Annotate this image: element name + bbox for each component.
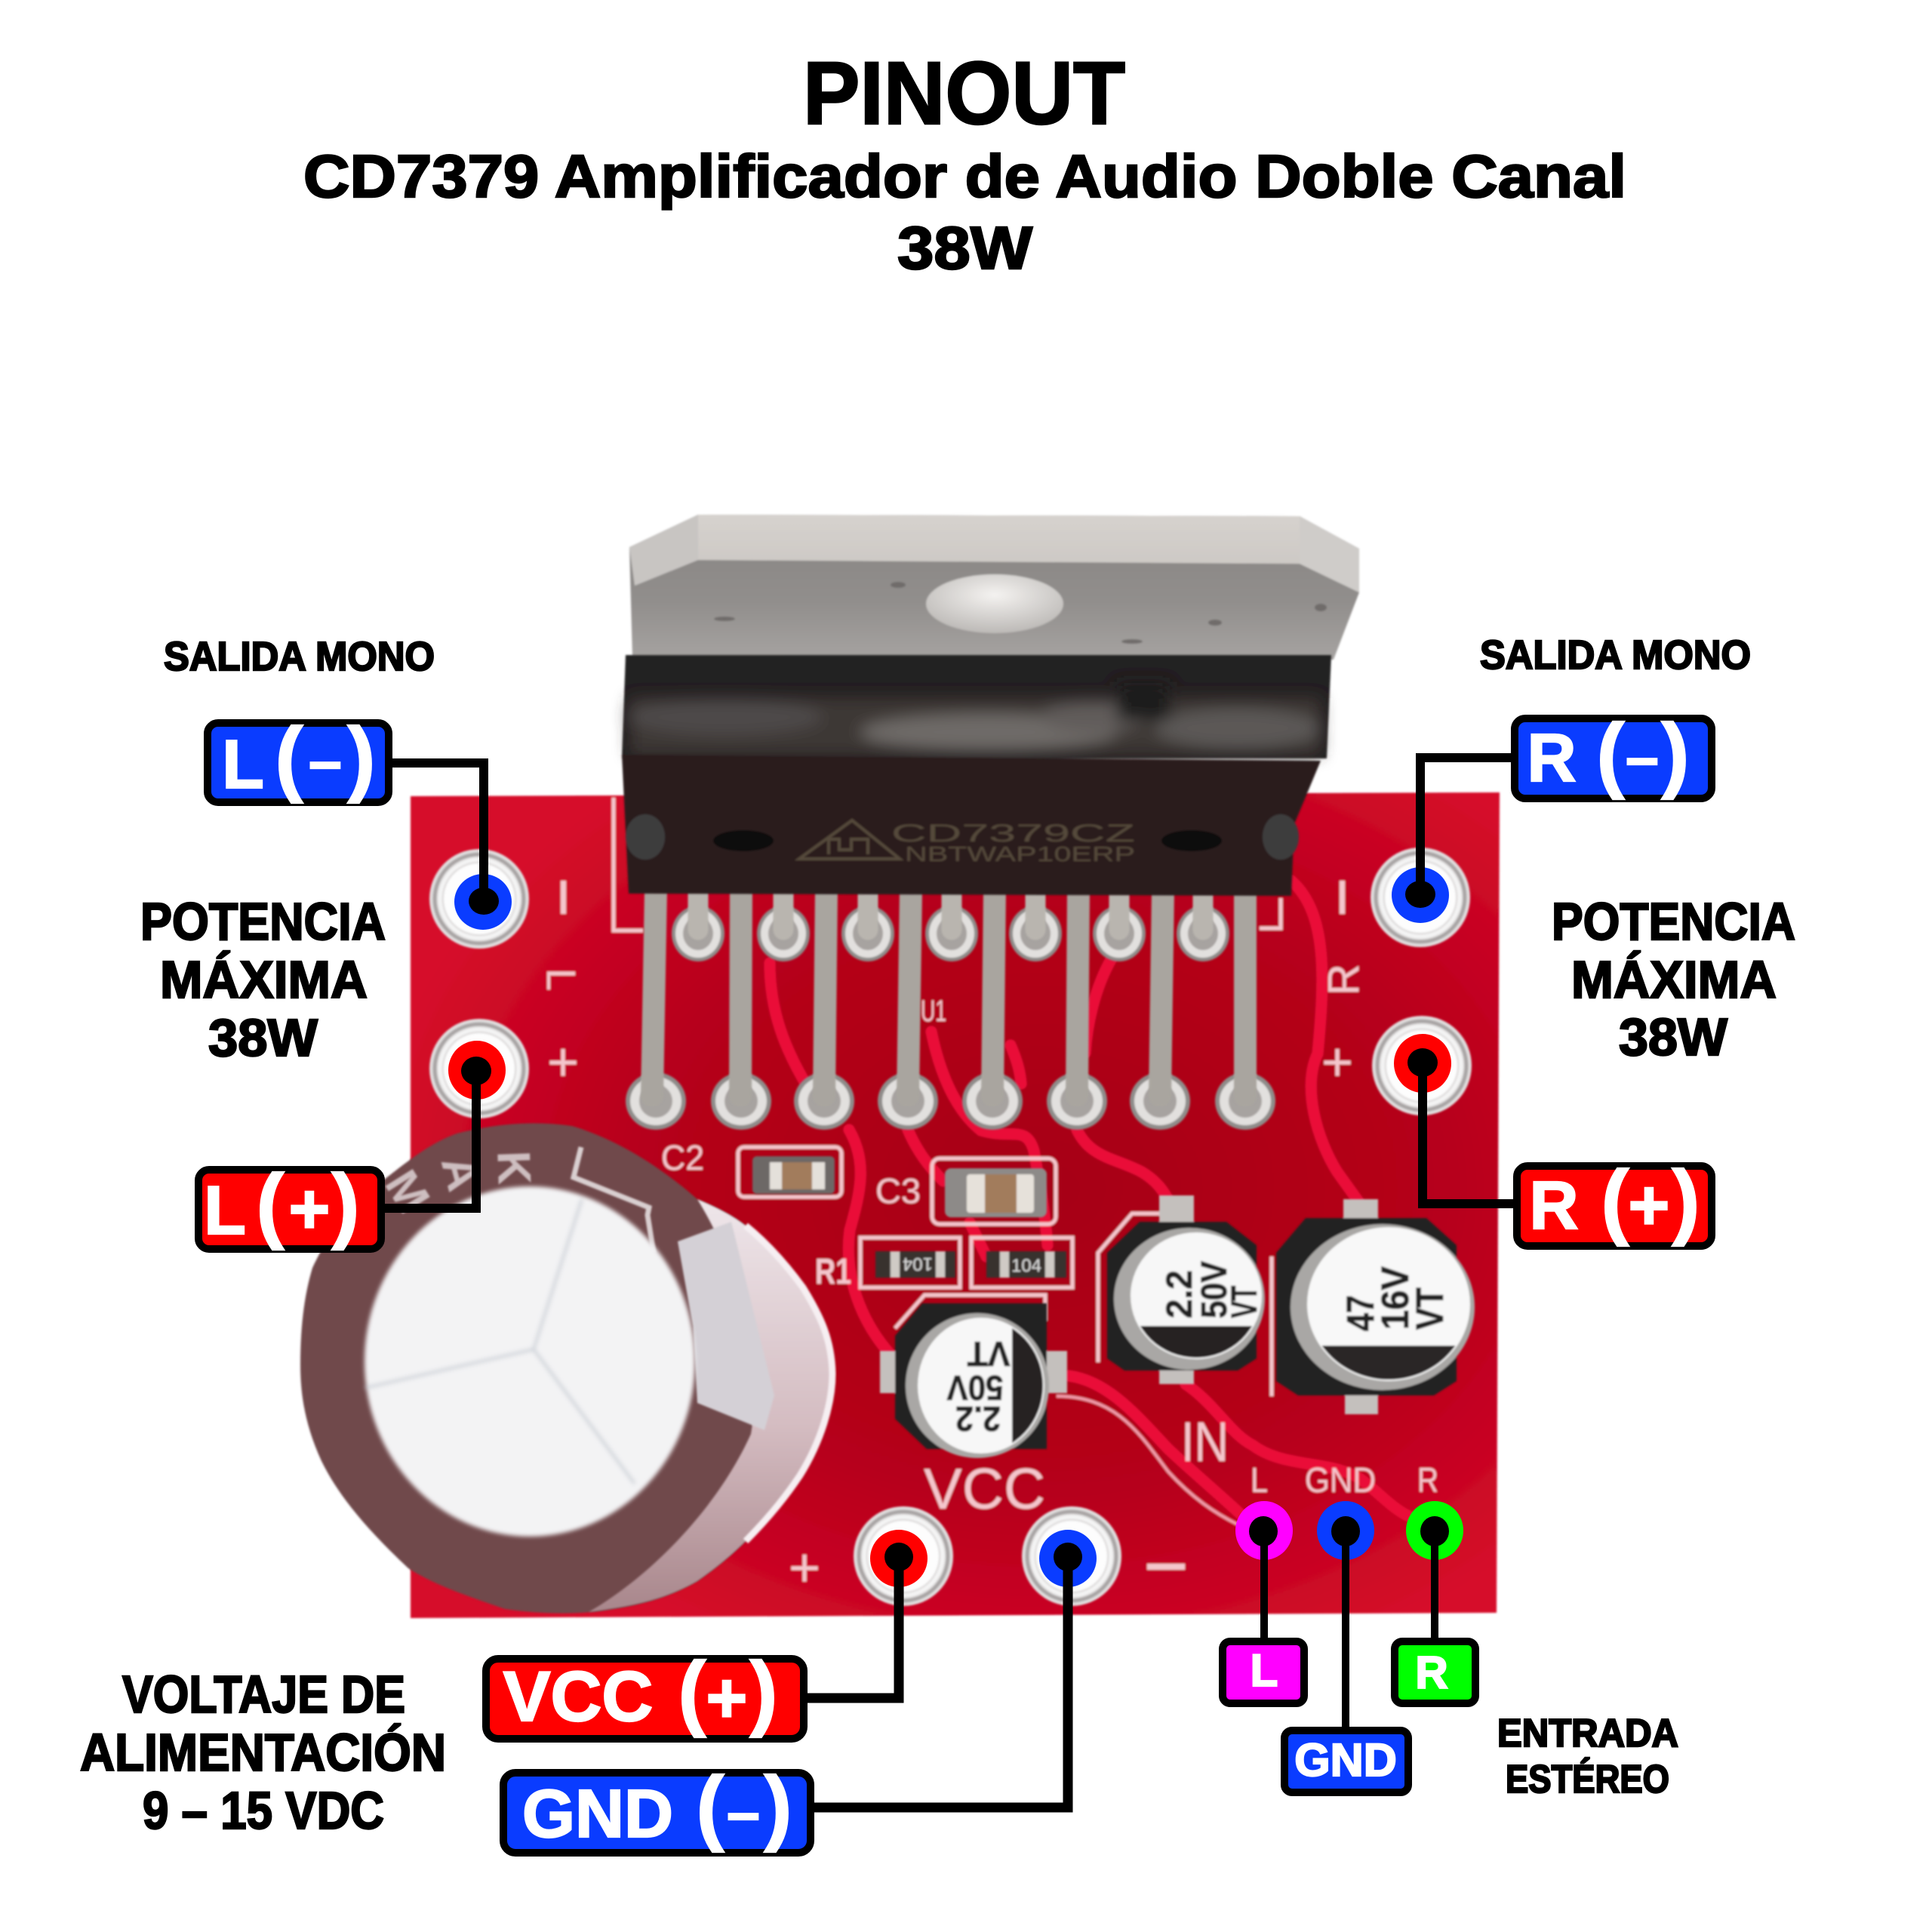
- text: salida mono right: SALIDA MONO: [1480, 632, 1751, 678]
- silkscreen: U1: [921, 995, 946, 1028]
- pad marker input GND: [1317, 1501, 1374, 1731]
- text: potencia maxima left: MÁXIMA: [160, 950, 368, 1009]
- text: potencia maxima right: [1552, 892, 1795, 1066]
- capacitor 47uF 16V: VT: [1408, 1287, 1451, 1330]
- capacitor body silhouette: [300, 1123, 832, 1614]
- silkscreen: VCC: [924, 1457, 1045, 1521]
- label: R minus: (: [1597, 707, 1625, 800]
- capacitor 47uF 16V: [1276, 1199, 1479, 1414]
- title: PINOUT: [803, 44, 1125, 143]
- pad marker GND: [814, 1530, 1097, 1807]
- silkscreen: L: [538, 968, 583, 991]
- label: R plus: ): [1672, 1154, 1700, 1247]
- label: VCC plus: (: [678, 1645, 706, 1738]
- label: GND minus: [503, 1760, 811, 1853]
- text: stereo input: ENTRADA: [1497, 1712, 1678, 1755]
- label: VCC plus: +: [706, 1658, 747, 1737]
- sleeve markings: M: [374, 1161, 439, 1222]
- can rim highlight: [746, 1226, 832, 1541]
- SMD components: [752, 1156, 1479, 1458]
- label: R plus: (: [1601, 1154, 1629, 1247]
- sleeve markings: A: [431, 1150, 490, 1196]
- pad marker input R: [1406, 1501, 1463, 1641]
- silkscreen: [538, 798, 1438, 1598]
- label: L plus: ): [332, 1158, 359, 1251]
- label: R minus: [1515, 707, 1712, 800]
- label: L plus: +: [289, 1169, 330, 1248]
- IC body: [622, 655, 1331, 896]
- silkscreen: +: [1321, 1032, 1353, 1093]
- label: R minus: R: [1527, 721, 1576, 796]
- title: 38W: [897, 214, 1033, 281]
- resistor R1: 104: [903, 1254, 933, 1274]
- text: potencia maxima left: 38W: [208, 1008, 318, 1067]
- capacitor C2: [752, 1156, 835, 1194]
- label: L plus: [198, 1158, 381, 1251]
- label: input GND: GND: [1294, 1734, 1397, 1786]
- label: L minus: L: [222, 727, 264, 803]
- pad marker L plus: [385, 1041, 506, 1208]
- label: VCC plus: ): [750, 1645, 777, 1738]
- pad marker L minus: [392, 763, 512, 930]
- label: GND minus: –: [727, 1779, 760, 1845]
- text: stereo input: ESTÉREO: [1506, 1758, 1669, 1801]
- label: L plus: L: [204, 1173, 246, 1249]
- sleeve markings: K: [487, 1150, 540, 1186]
- capacitor 2.2uF 50V upper: 2.2: [1160, 1270, 1200, 1318]
- label: R plus: R: [1529, 1168, 1579, 1244]
- label: input GND: [1284, 1730, 1408, 1792]
- label: VCC plus: VCC: [503, 1657, 653, 1736]
- resistor R1: [875, 1251, 955, 1278]
- text: supply voltage: [80, 1665, 446, 1840]
- IC manufacturer logo: [799, 820, 900, 859]
- text: potencia maxima left: POTENCIA: [140, 892, 386, 951]
- label: input R: R: [1415, 1647, 1448, 1698]
- IC metal tab: [629, 515, 1359, 660]
- pad marker VCC: [808, 1530, 928, 1698]
- capacitor 2.2uF 50V upper: 50V: [1195, 1261, 1235, 1318]
- label: R minus: –: [1626, 724, 1659, 790]
- module photo: amplifier board: [300, 515, 1500, 1618]
- sleeve white stripe: [678, 1222, 774, 1430]
- silkscreen: +: [547, 1032, 579, 1093]
- IC markings: CD7379CZ: [891, 820, 1135, 847]
- label: L minus: (: [275, 711, 303, 804]
- text: supply voltage: 9 – 15 VDC: [143, 1781, 384, 1840]
- label: R minus: ): [1662, 707, 1689, 800]
- label: GND minus: ): [764, 1760, 792, 1853]
- silkscreen: R: [1417, 1460, 1438, 1500]
- text: potencia maxima right: 38W: [1619, 1008, 1727, 1066]
- sleeve markings: [374, 1147, 654, 1253]
- title: CD7379 Amplificador de Audio Doble Canal: [303, 143, 1626, 210]
- label: L minus: [208, 711, 389, 804]
- capacitor C3: [945, 1168, 1047, 1217]
- label: VCC plus: [486, 1645, 804, 1739]
- solder pads: IC through-holes: [626, 906, 1275, 1130]
- PCB: [411, 792, 1500, 1618]
- capacitor 47uF 16V: 47: [1339, 1295, 1382, 1331]
- resistor R2: [986, 1251, 1066, 1278]
- label: L plus: (: [257, 1158, 285, 1251]
- title: [303, 44, 1626, 281]
- silkscreen: L: [1251, 1460, 1268, 1500]
- label: input L: L: [1251, 1645, 1278, 1696]
- silkscreen: C2: [661, 1138, 704, 1177]
- IC pins: [652, 891, 1245, 1096]
- silkscreen: IN: [1181, 1411, 1229, 1473]
- pad marker R minus: [1392, 758, 1511, 923]
- text: salida mono left: SALIDA MONO: [164, 634, 435, 679]
- capacitor 2.2uF 50V lower: VT: [968, 1334, 1010, 1374]
- pin markers: pads and leader lines: [385, 758, 1513, 1807]
- aluminium top with vent score: [365, 1186, 695, 1537]
- label: R plus: [1517, 1154, 1712, 1247]
- label: L minus: ): [348, 711, 375, 804]
- label: L minus: –: [309, 728, 342, 794]
- resistor R2: 104: [1011, 1256, 1041, 1276]
- pad marker R plus: [1394, 1034, 1513, 1204]
- copper traces: [770, 881, 1411, 1518]
- capacitor 2.2uF 50V upper: [1107, 1195, 1268, 1384]
- label: GND minus: (: [697, 1760, 724, 1853]
- text: supply voltage: VOLTAJE DE: [122, 1665, 405, 1724]
- label: R plus: +: [1629, 1165, 1669, 1244]
- text: potencia maxima right: POTENCIA: [1552, 892, 1795, 951]
- IC markings: NBTWAP10ERP: [905, 842, 1135, 866]
- text: stereo input: [1497, 1712, 1678, 1801]
- text: potencia maxima left: [140, 892, 386, 1067]
- capacitor 47uF 16V: 16V: [1374, 1266, 1417, 1330]
- label: input R: [1395, 1641, 1475, 1703]
- text: potencia maxima right: MÁXIMA: [1571, 950, 1777, 1009]
- output and power pads: [429, 848, 1472, 1606]
- silkscreen: C3: [875, 1171, 921, 1211]
- silkscreen: GND: [1305, 1460, 1376, 1500]
- pad marker input L: [1235, 1501, 1293, 1641]
- large electrolytic capacitor: [300, 1123, 832, 1614]
- capacitor 2.2uF 50V lower: 50V: [946, 1368, 1004, 1407]
- text: supply voltage: ALIMENTACIÓN: [80, 1723, 446, 1782]
- IC markings: [891, 820, 1135, 866]
- silver side of can: [589, 1199, 832, 1612]
- silkscreen: R1: [815, 1252, 851, 1292]
- label: GND minus: GND: [522, 1777, 673, 1852]
- silkscreen: R: [1319, 964, 1368, 995]
- capacitor 2.2uF 50V lower: [880, 1303, 1067, 1458]
- label: input L: [1223, 1641, 1304, 1703]
- capacitor 2.2uF 50V lower: 2.2: [955, 1399, 1001, 1438]
- capacitor 2.2uF 50V upper: VT: [1225, 1286, 1265, 1318]
- silkscreen: +: [789, 1538, 820, 1598]
